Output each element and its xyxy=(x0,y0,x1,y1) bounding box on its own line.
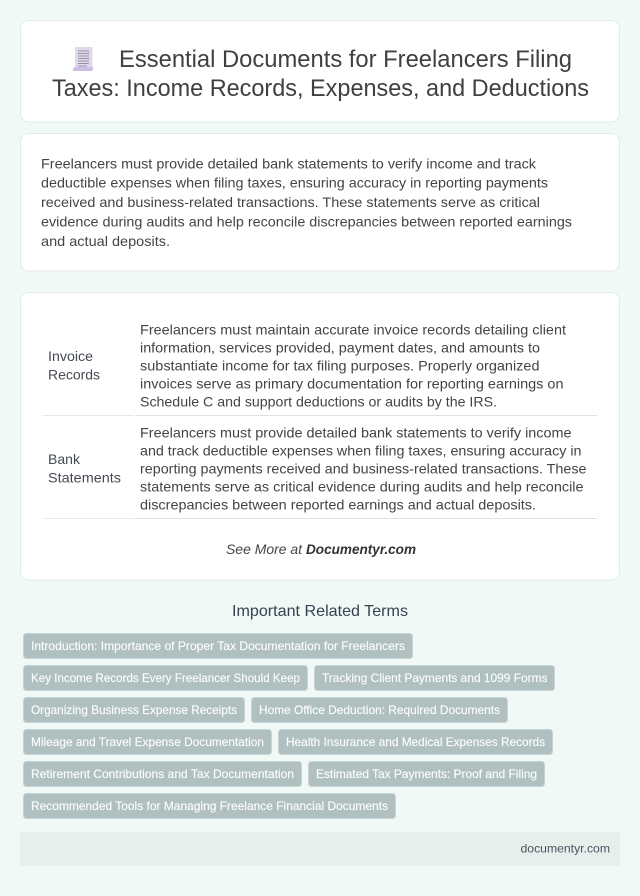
tag: Recommended Tools for Managing Freelance Financial Documents xyxy=(31,799,388,813)
tag: Estimated Tax Payments: Proof and Filing xyxy=(316,767,537,781)
title: Essential Documents for Freelancers Filing xyxy=(119,46,572,73)
panel: introduction paragraph xyxy=(20,134,620,271)
intro text: deductible expenses when filing taxes, ensuring accuracy in reporting payments xyxy=(41,175,548,191)
title: Taxes: Income Records, Expenses, and Deductions xyxy=(52,75,589,102)
tag xyxy=(314,666,554,690)
tag xyxy=(24,730,272,754)
tag: Key Income Records Every Freelancer Should Keep xyxy=(31,671,300,685)
title xyxy=(52,46,589,102)
tag xyxy=(24,794,396,818)
row label: invoice records: Records xyxy=(48,366,100,382)
row description: invoice records: invoices serve as primary documentation for reporting earnings on xyxy=(140,375,564,391)
icon: document receipt xyxy=(73,47,93,71)
tag group: related terms xyxy=(24,634,554,818)
row: invoice records xyxy=(43,321,597,416)
tag: Health Insurance and Medical Expenses Records xyxy=(286,735,545,749)
panel: documents table xyxy=(20,292,620,580)
row description: invoice records: Freelancers must maintain accurate invoice records detailing client xyxy=(140,321,566,337)
tag: Introduction: Importance of Proper Tax Documentation for Freelancers xyxy=(31,639,405,653)
see more link: Documentyr.com xyxy=(306,541,416,557)
row description: invoice records: Schedule C and support deductions or audits by the IRS. xyxy=(140,393,497,409)
footer bar xyxy=(20,832,620,866)
footer bar: documentyr.com xyxy=(520,842,610,856)
tag: Organizing Business Expense Receipts xyxy=(31,703,237,717)
tag xyxy=(24,634,412,658)
row label: invoice records: Invoice xyxy=(48,348,93,364)
tag: Tracking Client Payments and 1099 Forms xyxy=(322,671,548,685)
tag xyxy=(24,666,308,690)
tag xyxy=(24,762,302,786)
row label: bank statements: Statements xyxy=(48,469,121,485)
tag: Retirement Contributions and Tax Documentation xyxy=(31,767,294,781)
tag xyxy=(252,698,508,722)
panel: title card xyxy=(20,20,620,122)
intro text: received and business-related transactions. These statements serve as critical xyxy=(41,194,540,210)
row description: bank statements: and track deductible expenses when filing taxes, ensuring accuracy in xyxy=(140,442,582,458)
heading: important related terms: Important Related Terms xyxy=(232,603,408,620)
row label: invoice records xyxy=(48,348,100,382)
tag xyxy=(24,698,244,722)
row label: bank statements: Bank xyxy=(48,451,81,467)
row description: invoice records: information, services provided, payment dates, and amounts to xyxy=(140,339,540,355)
row description: invoice records: substantiate income for tax filing purposes. Properly organized xyxy=(140,357,540,373)
row label: bank statements xyxy=(48,451,121,485)
tag xyxy=(308,762,544,786)
intro text: and actual deposits. xyxy=(41,233,170,249)
tag: Home Office Deduction: Required Documents xyxy=(259,703,500,717)
row description: bank statements: reporting payments received and business-related transactions. These xyxy=(140,460,587,476)
tag: Mileage and Travel Expense Documentation xyxy=(31,735,264,749)
intro text: evidence during audits and help reconcile discrepancies between reported earnings xyxy=(41,214,572,230)
row description: bank statements: discrepancies between reported earnings and actual deposits. xyxy=(140,496,536,512)
tag xyxy=(278,730,552,754)
intro text: Freelancers must provide detailed bank statements to verify income and track xyxy=(41,155,537,171)
see more link: See More at xyxy=(226,541,303,557)
row description: invoice records xyxy=(140,321,566,409)
row: bank statements xyxy=(43,424,597,519)
row description: bank statements: Freelancers must provide detailed bank statements to verify income xyxy=(140,424,572,440)
intro text xyxy=(41,155,572,249)
row description: bank statements: statements serve as critical evidence during audits and help reconcile xyxy=(140,478,584,494)
row description: bank statements xyxy=(140,424,587,512)
see more link xyxy=(226,541,416,557)
